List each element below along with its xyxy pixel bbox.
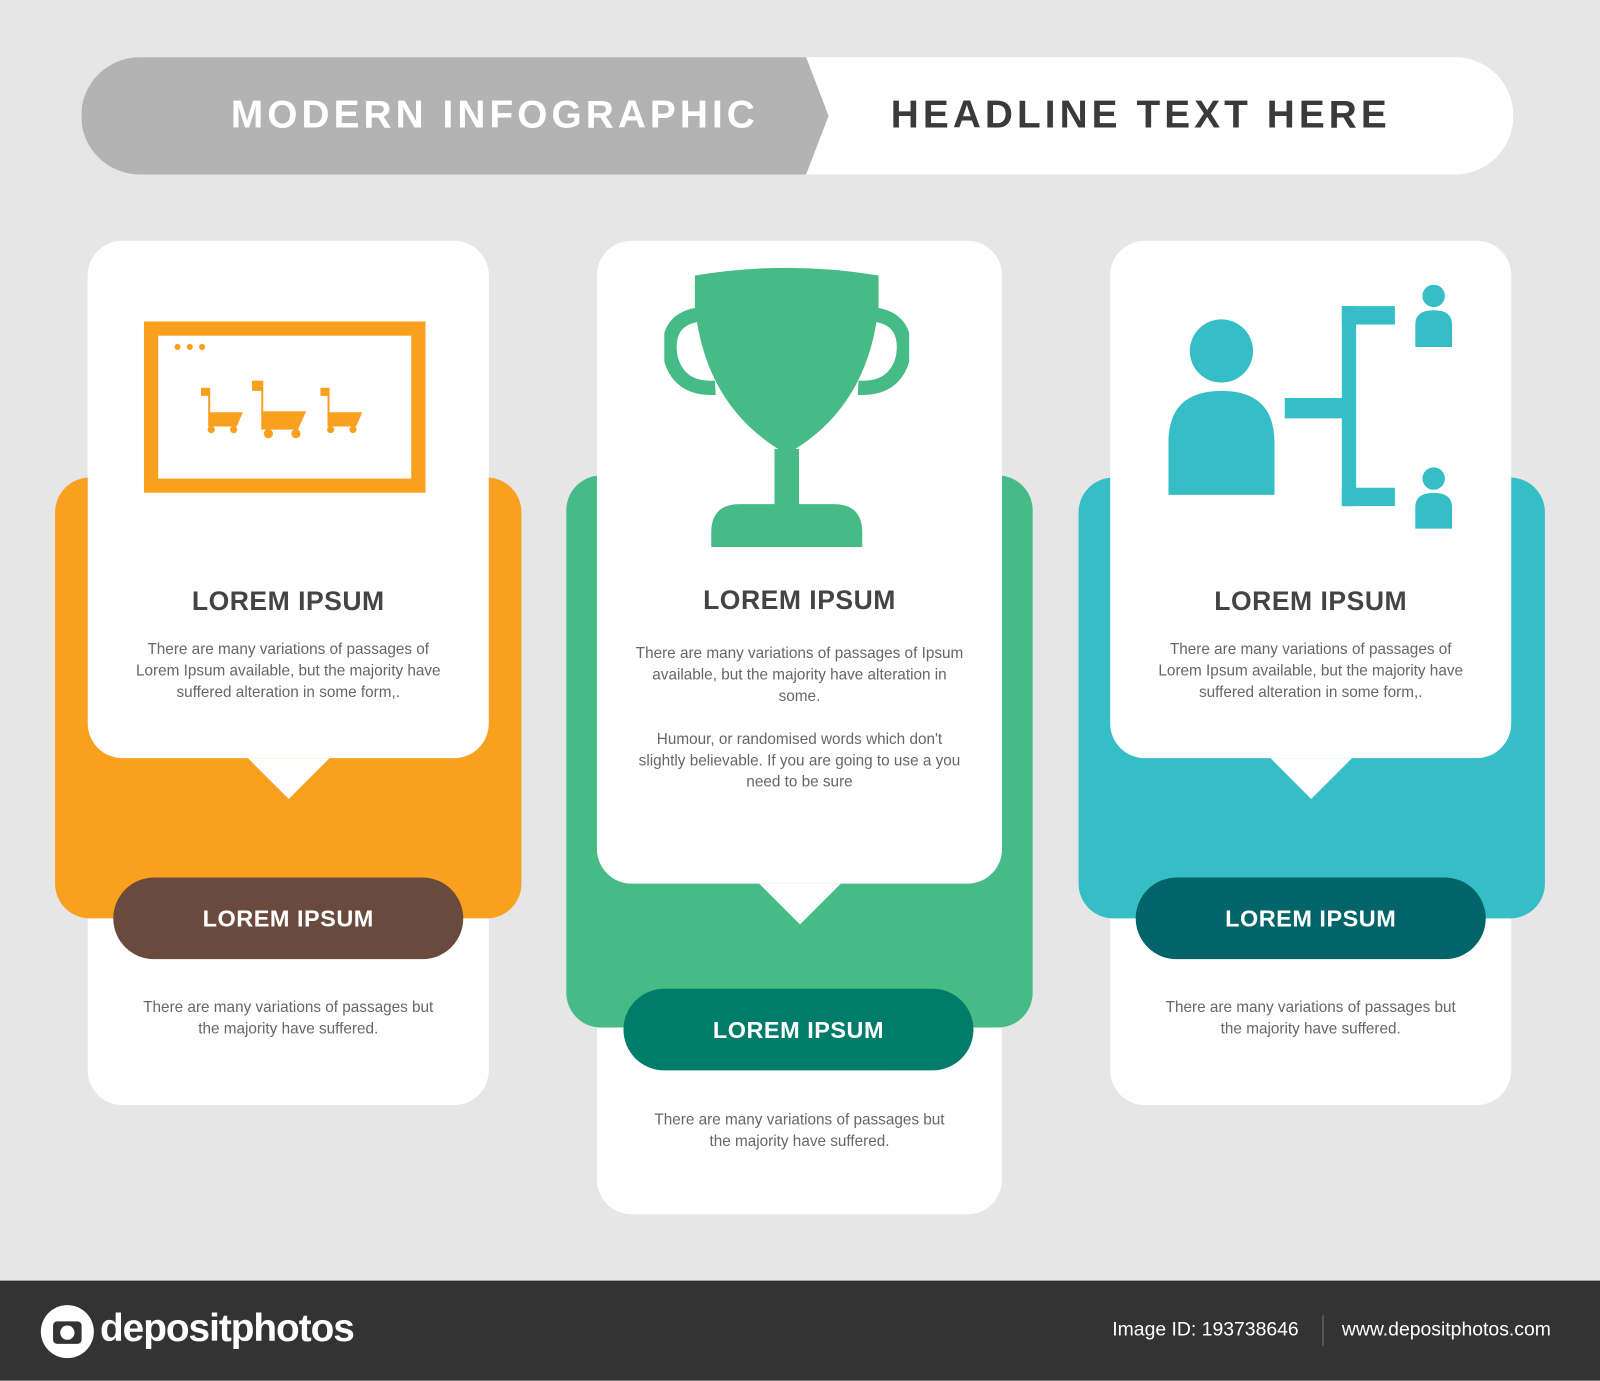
footer logo <box>40 1305 354 1358</box>
button: LOREM IPSUM <box>1225 905 1396 932</box>
bottom text: There are many variations of passages but the majority have suffered. <box>143 999 433 1038</box>
button <box>1136 878 1486 959</box>
bottom text: There are many variations of passages but the majority have suffered. <box>1166 999 1456 1038</box>
panel: middle <box>566 240 1033 1214</box>
footer image id: Image ID: 193738646 <box>1112 1319 1299 1341</box>
button <box>623 989 973 1070</box>
icon: hierarchy people <box>1168 284 1452 529</box>
text <box>636 645 963 791</box>
title: MODERN INFOGRAPHIC <box>231 94 759 137</box>
panel: right <box>1078 240 1545 1105</box>
headline: HEADLINE TEXT HERE <box>891 94 1391 137</box>
heading: LOREM IPSUM <box>1214 586 1407 616</box>
text: There are many variations of passages of Lorem Ipsum available, but the majority have suffered alteration in some form,. <box>136 641 441 701</box>
footer logo: depositphotos <box>100 1307 354 1350</box>
icon: trophy <box>664 268 910 547</box>
footer url: www.depositphotos.com <box>1342 1319 1551 1341</box>
button: LOREM IPSUM <box>203 905 374 932</box>
heading: LOREM IPSUM <box>703 585 896 615</box>
heading: LOREM IPSUM <box>192 586 385 616</box>
button: LOREM IPSUM <box>713 1016 884 1043</box>
text: There are many variations of passages of Lorem Ipsum available, but the majority have suffered alteration in some form,. <box>1158 641 1463 701</box>
footer bar <box>0 1281 1600 1381</box>
bottom text: There are many variations of passages but the majority have suffered. <box>654 1111 945 1150</box>
text: There are many variations of passages of Ipsum available, but the majority have alteration in some. <box>636 645 963 705</box>
header bar <box>82 57 1513 174</box>
icon: shopping browser <box>144 322 426 493</box>
panel: left <box>55 240 522 1105</box>
button <box>113 878 463 959</box>
text: Humour, or randomised words which don't slightly believable. If you are going to use a you need to be sure <box>639 731 960 791</box>
